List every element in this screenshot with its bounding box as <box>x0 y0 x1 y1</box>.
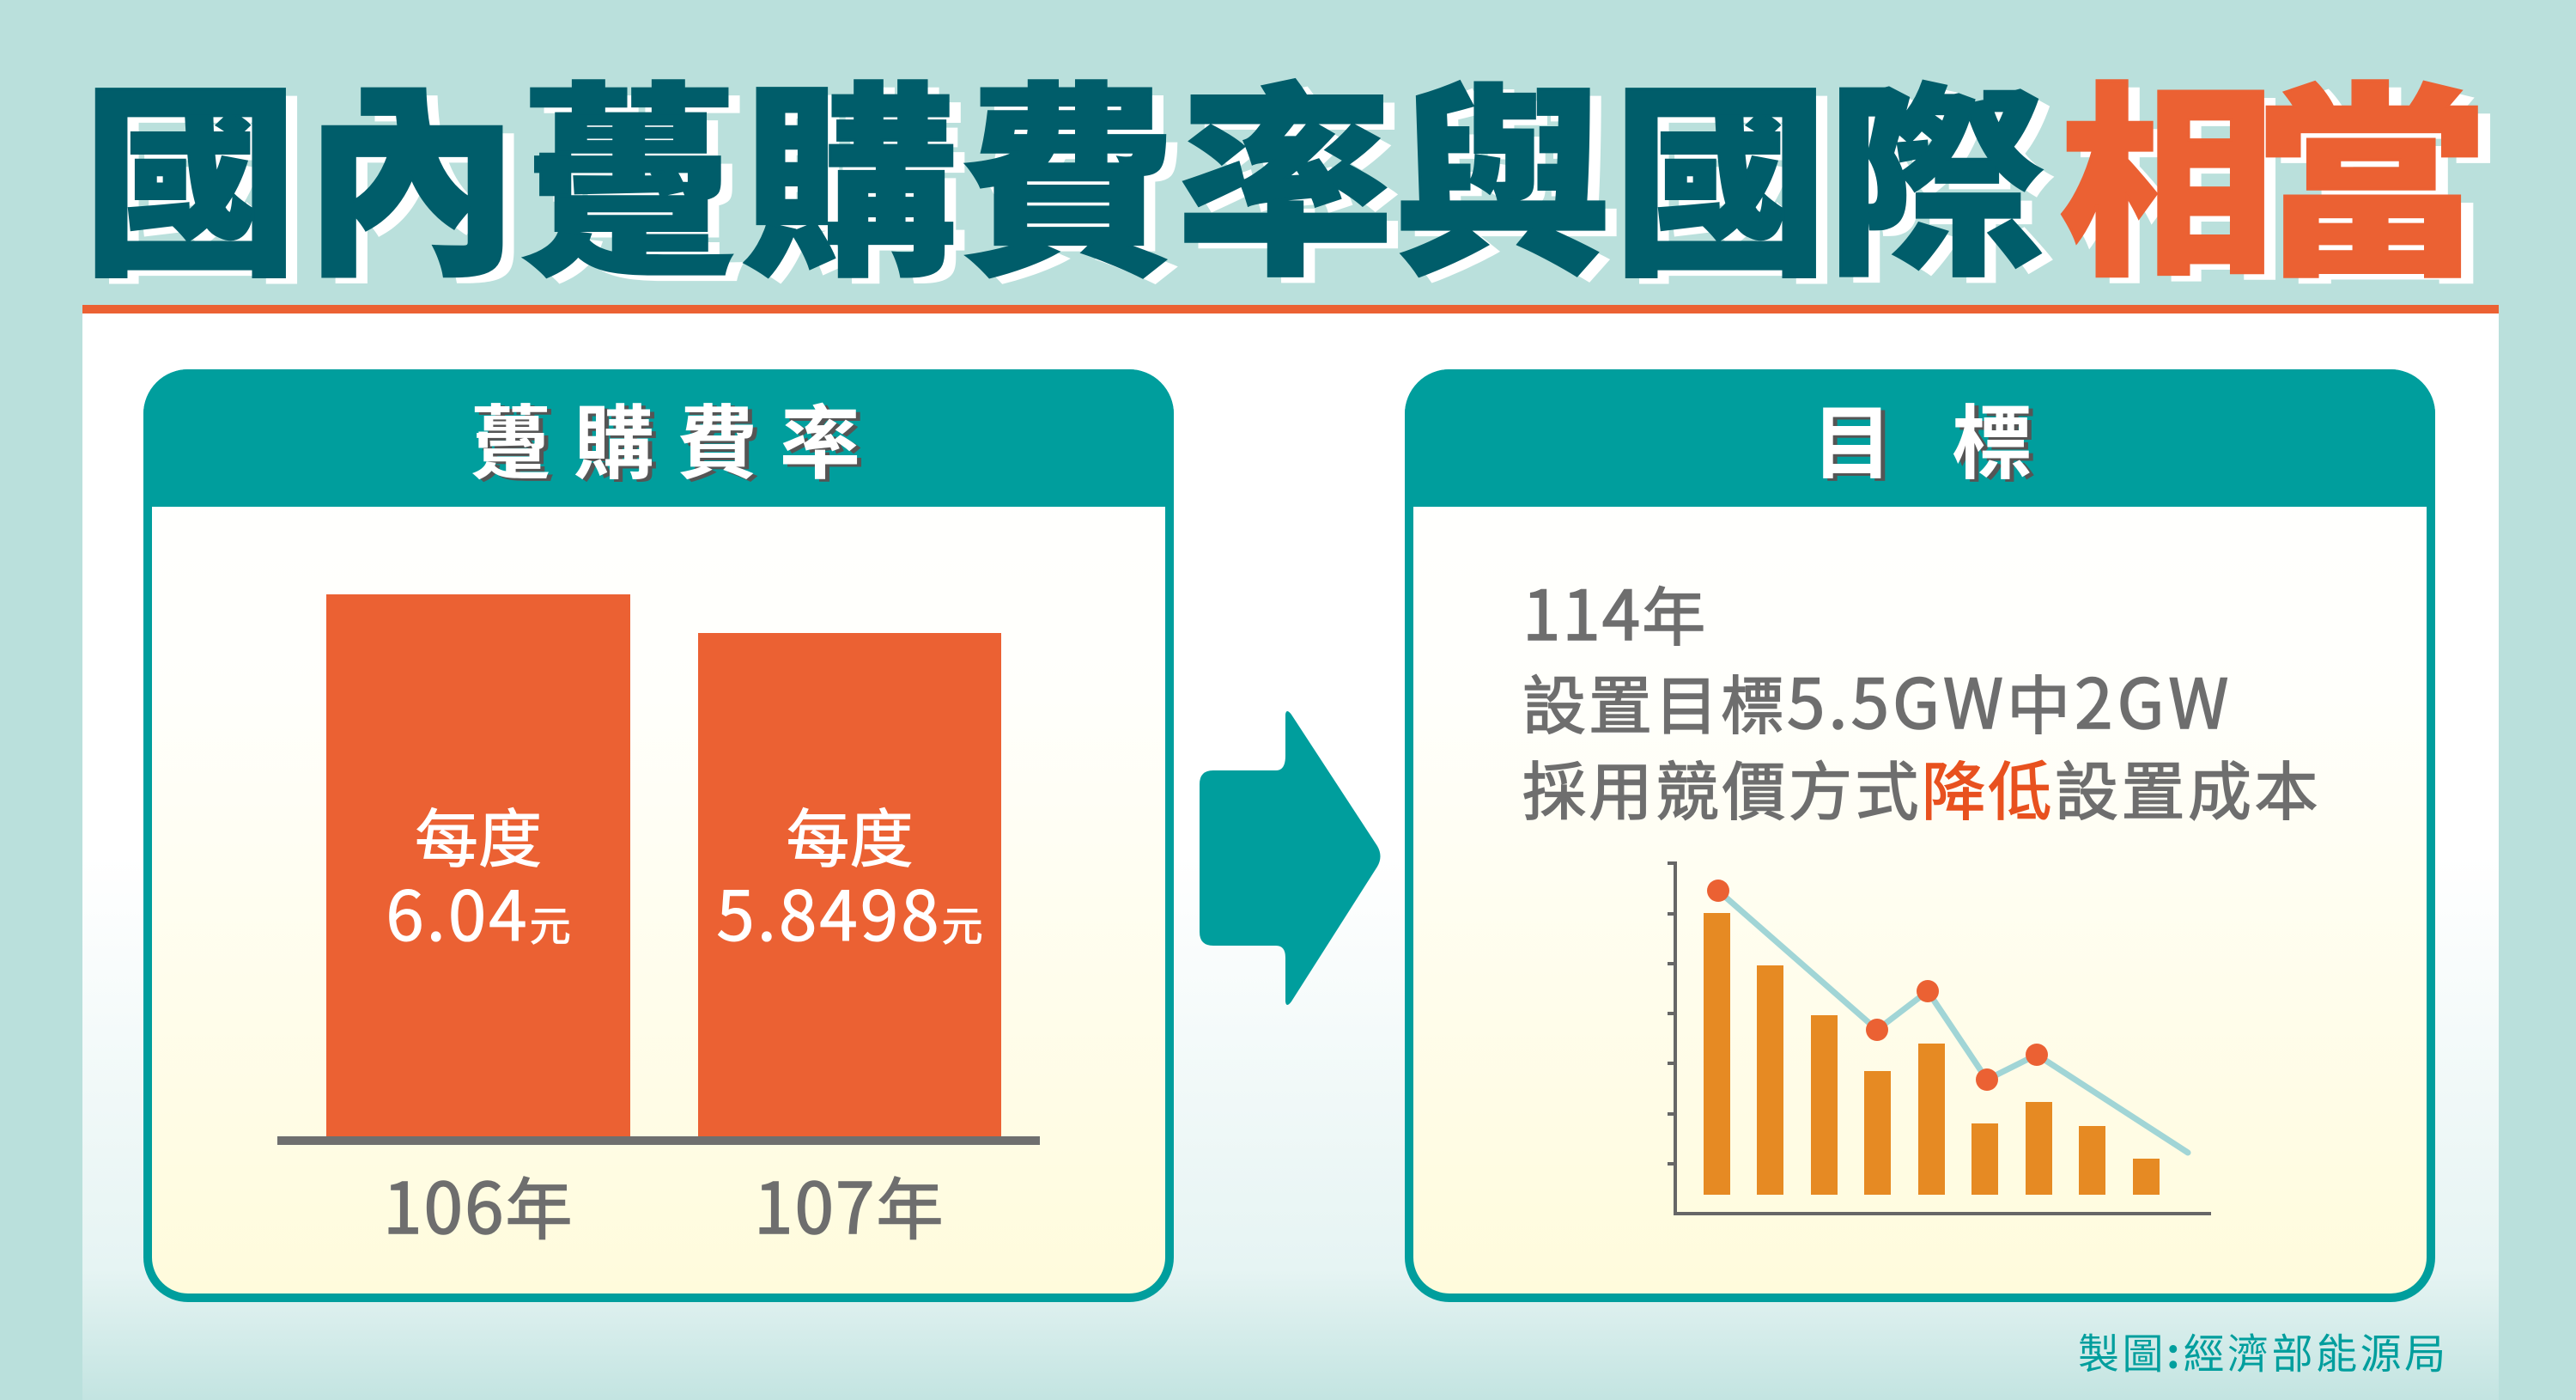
white content panel <box>82 309 2499 1400</box>
title <box>82 19 2490 317</box>
panel heading: 目標: 目標 <box>1812 379 2092 496</box>
arrow <box>1200 711 1381 1005</box>
title: 當 <box>2253 19 2488 317</box>
title: 國 <box>1613 19 1829 317</box>
axes <box>1668 863 2211 1214</box>
bar: 106年 rate <box>326 594 630 1137</box>
title: 際 <box>1828 19 2044 317</box>
data points <box>1707 880 2048 1091</box>
bar label: 107 rate: 5.8498元 <box>716 861 983 961</box>
bars <box>1704 913 2160 1195</box>
title: 內 <box>303 19 519 317</box>
chart: declining bars and trend line <box>1668 861 2211 1215</box>
bar label: 107 rate: 每度 <box>787 788 914 880</box>
title: 躉 <box>521 19 738 317</box>
axis label: 106年: 106年 <box>383 1152 574 1254</box>
bar chart baseline <box>277 1136 1040 1145</box>
capacity target line: 設置目標5.5GW中2GW <box>1522 649 2233 749</box>
title: 率 <box>1177 19 1394 317</box>
panel heading: 目標 <box>1405 369 2435 507</box>
trend line <box>1718 891 2188 1153</box>
axis label: 107年: 107年 <box>754 1152 945 1254</box>
year line: 114年 <box>1522 561 1707 660</box>
panel: feed-in tariff rates <box>143 369 1174 1302</box>
bar label: 107 rate <box>716 788 983 961</box>
bar label: 106 rate <box>386 788 571 961</box>
panel heading: 躉購費率 <box>143 369 1174 507</box>
bar label: 106 rate: 6.04元 <box>386 861 571 961</box>
orange divider line <box>82 305 2499 313</box>
panel heading: 躉購費率: 躉購費率 <box>471 379 883 496</box>
target text <box>1522 561 2321 833</box>
cost reduction line: 採用競價方式降低設置成本 <box>1522 741 2321 833</box>
title: 相 <box>2059 19 2275 317</box>
title: 與 <box>1394 19 1611 317</box>
credit: 製圖:經濟部能源局 <box>2078 1320 2449 1380</box>
title: 購 <box>742 19 958 317</box>
title: 國 <box>82 19 299 317</box>
panel: target <box>1405 369 2435 1302</box>
bar: 107年 rate <box>698 633 1001 1137</box>
title: 費 <box>959 19 1176 317</box>
bar label: 106 rate: 每度 <box>415 788 542 880</box>
